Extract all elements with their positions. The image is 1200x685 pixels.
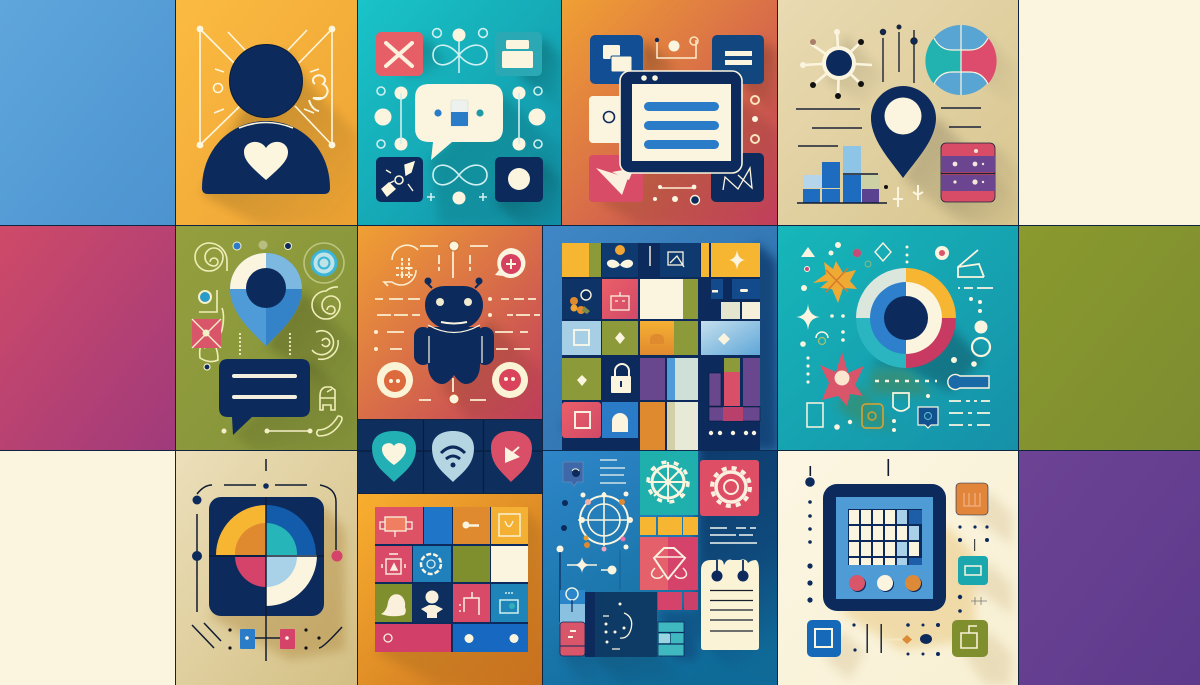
panel: navy pin strip (358, 420, 542, 493)
panel: teal donut (778, 226, 1018, 450)
background: cream panel top right (1019, 0, 1200, 225)
panel: robot (358, 226, 542, 419)
panel: teal app icons (358, 0, 561, 225)
yellow strip (640, 517, 698, 535)
icon: heart pin (372, 431, 416, 482)
tile: olive profile (375, 584, 412, 622)
connector (264, 428, 312, 434)
tile: navy person (413, 584, 451, 622)
small badges (804, 246, 949, 428)
icon: key column (560, 588, 585, 656)
icon: robot (414, 278, 494, 384)
vertical ticks (880, 25, 917, 83)
icon: segmented circle (925, 25, 997, 95)
connectors and infinity loops (374, 28, 546, 204)
bar chart (797, 146, 923, 207)
icon: red star (820, 352, 864, 406)
icon: notepad (701, 559, 759, 650)
icon: right face circle (492, 362, 528, 398)
icon: red cross tile (376, 32, 423, 76)
tile: red gem (640, 537, 698, 590)
tile: red hook (453, 584, 490, 622)
connector dots (653, 37, 759, 204)
icon: blue swirl (304, 243, 344, 283)
icon: blue node (240, 629, 255, 649)
mosaic navy base (562, 243, 760, 450)
icon: map pin (230, 253, 302, 346)
sparkles and dots (796, 242, 988, 432)
icon: calendar (611, 292, 629, 310)
icon: orange tile (956, 483, 988, 515)
icon: picture frame (668, 252, 684, 267)
tile: speech badge (563, 462, 583, 486)
text lines (600, 460, 626, 483)
stacked bar chart (709, 358, 760, 435)
icon: plus bubble (495, 248, 525, 278)
tile: teal bricks (658, 622, 684, 656)
icon: sun gear (800, 29, 872, 99)
cross axis and brackets (192, 459, 342, 661)
text lines (796, 108, 981, 146)
tile: red robot (375, 546, 412, 582)
icon: map pin (871, 86, 936, 178)
chat bubble (219, 359, 310, 435)
icon: red fold tile (589, 155, 643, 202)
icon: menu tile (712, 35, 764, 84)
window (620, 71, 742, 173)
icon: pie tile (209, 497, 324, 616)
tile: blue gear (413, 546, 451, 582)
tile: teal wheel (640, 451, 698, 515)
icon: teal stacked tile (495, 32, 542, 76)
dots and ticks (805, 459, 989, 656)
small red tiles (658, 592, 698, 610)
icon: globe grid (384, 245, 418, 286)
panel: map pin and charts (778, 0, 1018, 225)
background: purple panel (1019, 451, 1200, 685)
icon: padlock (611, 364, 631, 393)
tile: yellow frame (491, 507, 528, 544)
tile: red device (375, 507, 423, 544)
icon: navy wave tile (711, 153, 764, 202)
icon: blue tile (807, 620, 841, 657)
panel: person with heart (176, 0, 357, 225)
icon: stack tile (941, 143, 995, 202)
text lines dark (710, 528, 757, 543)
background: cream panel bottom left (0, 451, 175, 685)
panel: window and tiles (562, 0, 777, 225)
panel: tan pie tile (176, 451, 357, 685)
tile: orange arrow (453, 507, 490, 544)
icon: overlapping squares tile (590, 35, 643, 84)
icon: red node (280, 629, 295, 649)
icon: olive tile (952, 620, 988, 657)
icon: left face circle (377, 362, 413, 398)
line ornaments (807, 243, 993, 427)
tile: blue camera (491, 584, 528, 622)
swirls and outline doodles (195, 243, 342, 436)
panel: olive map pin and chat (176, 226, 357, 450)
small dots (199, 240, 292, 434)
panel: mosaic grid (543, 226, 777, 450)
icon: wifi pin (432, 431, 474, 482)
icon: gold star (813, 261, 857, 303)
panel: cream tablet (778, 451, 1018, 685)
icon: keys cluster (570, 290, 591, 314)
icon: cream ring tile (589, 96, 629, 143)
dotted lines (240, 333, 290, 355)
icon: navy network tile (376, 157, 423, 202)
background: magenta panel (0, 226, 175, 450)
dashed lines (375, 246, 540, 400)
icon: flower (607, 245, 633, 268)
tile: crimson bar (375, 624, 451, 652)
background: olive panel right (1019, 226, 1200, 450)
icon: navy circle tile (495, 157, 543, 202)
icon: sparkle connector (556, 546, 620, 622)
icon: tablet (823, 484, 946, 611)
icon: teal tile (958, 556, 988, 585)
background: blue panel (0, 0, 175, 225)
icon: red envelope (192, 319, 221, 348)
icon: play pin (491, 431, 532, 482)
chat bubble (415, 84, 503, 160)
panel: yellow app tiles (358, 494, 542, 685)
tile: red gear (700, 460, 759, 516)
icon: donut chart (856, 268, 956, 368)
icon: crosshair wheel (561, 492, 633, 552)
key outline (948, 374, 989, 390)
panel: blue mixed tiles (543, 440, 790, 685)
tile: blue bar (453, 624, 528, 652)
tile: navy dotted face (585, 592, 657, 657)
